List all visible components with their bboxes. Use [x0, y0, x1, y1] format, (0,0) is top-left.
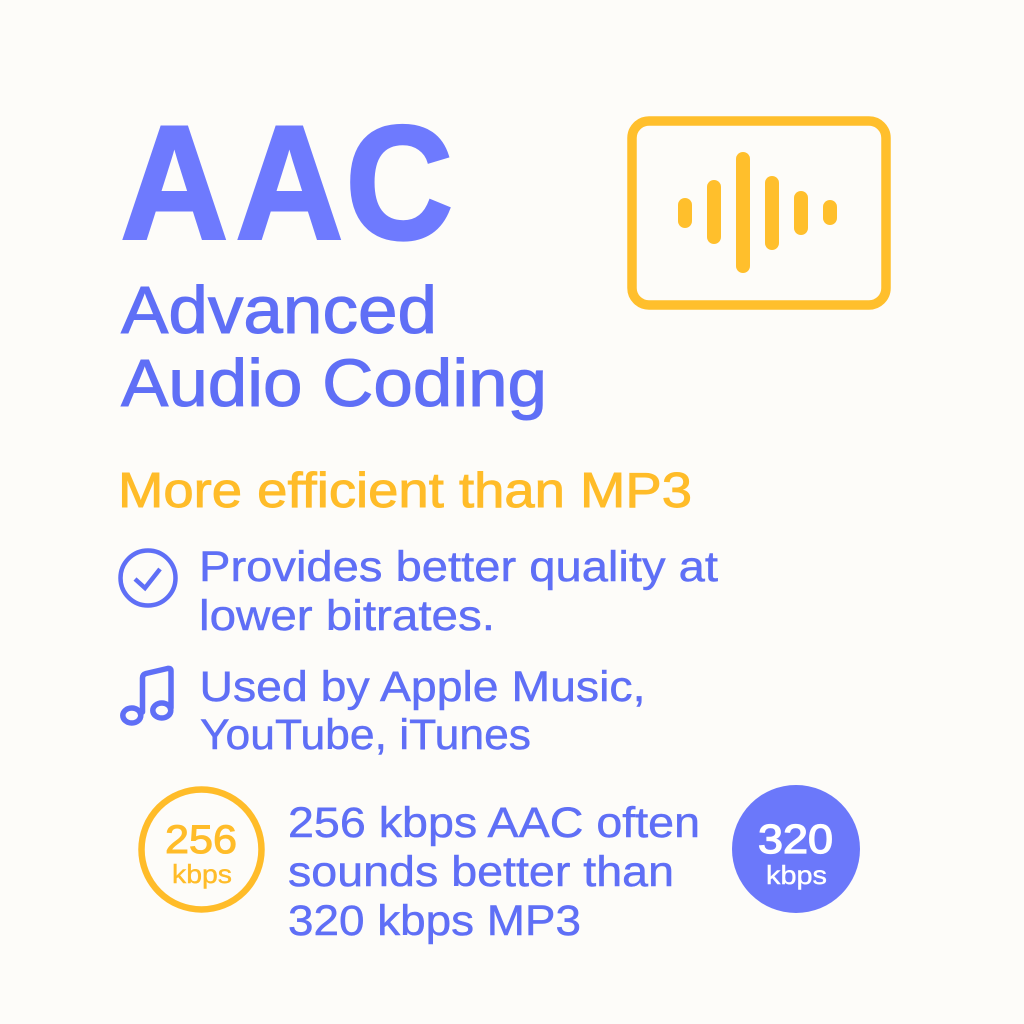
- text: used by: [200, 663, 646, 759]
- text: comparison: 320 kbps MP3: [288, 897, 581, 945]
- badge: 320 kbps: kbps: [766, 860, 827, 890]
- badge: 320 kbps: [732, 785, 860, 913]
- icon: audio waveform in rounded frame: [632, 121, 886, 305]
- subtitle: Advanced Audio Coding: Audio Coding: [121, 346, 547, 421]
- subtitle: Advanced Audio Coding: Advanced: [121, 273, 437, 348]
- text: comparison: [288, 799, 700, 945]
- icon: music note: [123, 668, 171, 723]
- text: used by: Used by Apple Music,: [200, 663, 646, 711]
- text: better quality: Provides better quality at: [199, 543, 718, 591]
- text: comparison: sounds better than: [288, 848, 674, 896]
- badge: 256 kbps: [142, 790, 262, 910]
- text: used by: YouTube, iTunes: [200, 711, 531, 759]
- text: better quality: lower bitrates.: [199, 592, 495, 640]
- subtitle: Advanced Audio Coding: [121, 273, 547, 421]
- title: AAC: AAC: [121, 92, 453, 273]
- badge: 320 kbps: 320: [758, 816, 833, 862]
- icon: check mark in circle: [120, 550, 176, 606]
- badge: 256 kbps: 256: [165, 818, 237, 862]
- text: better quality: [199, 543, 718, 640]
- text: comparison: 256 kbps AAC often: [288, 799, 700, 847]
- heading: More efficient than MP3: More efficient than MP3: [118, 464, 692, 518]
- badge: 256 kbps: kbps: [172, 859, 232, 889]
